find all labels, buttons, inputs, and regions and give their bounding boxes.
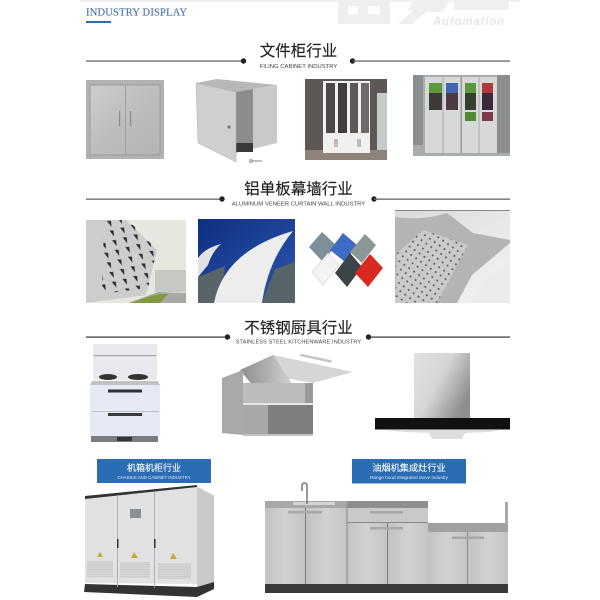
image: stainless double door [86, 80, 164, 159]
image: range hood [375, 353, 510, 439]
image: electrical cabinet [84, 485, 214, 597]
section heading: stainless kitchenware: 不锈钢厨具行业 [244, 319, 353, 337]
banner: chassis and cabinet: CHASSIS AND CABINET INDUSTRY [117, 475, 191, 480]
image: building facade [86, 220, 186, 303]
banner: chassis and cabinet [97, 459, 211, 483]
image: white glass bookcase [305, 79, 387, 160]
image: open electrical cabinet [196, 79, 277, 163]
heading: industry display: INDUSTRY DISPLAY [86, 8, 188, 18]
section heading: filing cabinet: FILING CABINET INDUSTRY [260, 64, 337, 70]
image: glass filing cabinet [413, 75, 510, 156]
section heading: aluminum veneer: ALUMINUM VENEER CURTAIN WALL INDUSTRY [232, 202, 365, 208]
section heading: stainless kitchenware [86, 319, 510, 346]
image: white curved roof [198, 219, 295, 303]
top edge strip [80, 0, 520, 2]
banner: chassis and cabinet: 机箱机柜行业 [127, 462, 181, 473]
section heading: filing cabinet: 文件柜行业 [260, 42, 337, 60]
banner: range hood stove: Range hood integrated stove industry [370, 475, 449, 480]
section heading: aluminum veneer [86, 180, 510, 208]
section heading: aluminum veneer: 铝单板幕墙行业 [244, 180, 353, 198]
section heading: filing cabinet [86, 42, 510, 70]
image: stainless kitchen cabinets [265, 483, 508, 593]
banner: range hood stove [352, 459, 466, 484]
banner: range hood stove: 油烟机集成灶行业 [372, 462, 446, 473]
section heading: stainless kitchenware: STAINLESS STEEL KITCHENWARE INDUSTRY [236, 340, 361, 346]
watermark logo [338, 0, 509, 28]
watermark logo: Automation [432, 16, 505, 28]
image: wall cabinet with lift door [222, 354, 353, 436]
image: integrated stove [90, 344, 160, 442]
image: colored panels [309, 232, 383, 287]
image: perforated panel [395, 210, 510, 303]
